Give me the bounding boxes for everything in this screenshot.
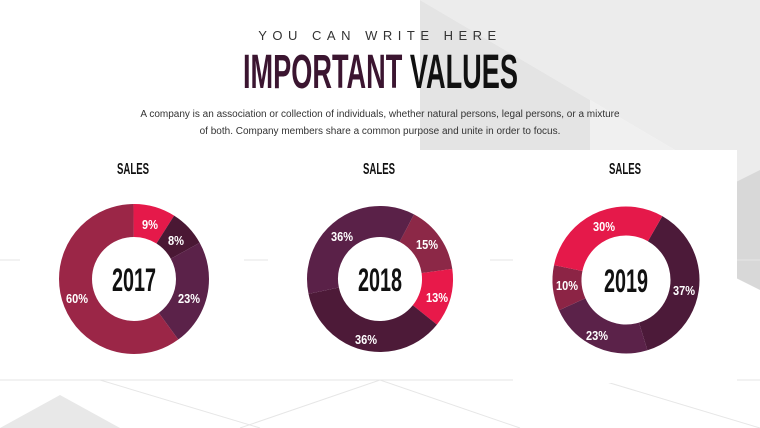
panel: 2018: 36% [331, 229, 353, 244]
panel: 2018: 36% [355, 332, 377, 347]
panel: 2018: 13% [426, 290, 448, 305]
subtitle: YOU CAN WRITE HERE [258, 28, 502, 43]
heading 2017 panel: SALES [117, 161, 149, 178]
panel: 2019: 2019 [604, 263, 648, 299]
donut chart 2019 [545, 199, 707, 361]
panel: 2018 [268, 150, 490, 372]
panel: 2018: 2018 [358, 262, 402, 298]
panel: 2017 [20, 150, 244, 370]
donut chart 2017 [76, 220, 192, 338]
panel: 2017: 2017 [112, 262, 156, 298]
panel: 2017: 60% [66, 291, 88, 306]
panel: 2017: 9% [142, 217, 158, 232]
panel: 2017: 23% [178, 291, 200, 306]
panel: 2019: 30% [593, 219, 615, 234]
description [140, 109, 620, 137]
title: IMPORTANT VALUES [243, 46, 518, 99]
description: of both. Company members share a common purpose and unite in order to focus. [200, 126, 560, 137]
description: A company is an association or collection of individuals, whether natural persons, legal persons, or a mixture [140, 109, 620, 120]
panel: 2019: 37% [673, 283, 695, 298]
panel: 2018: 15% [416, 237, 438, 252]
panel: 2017: 8% [168, 233, 184, 248]
heading 2018 panel: SALES [363, 161, 395, 178]
panel: 2019: 10% [556, 278, 578, 293]
heading 2019 panel: SALES [609, 161, 641, 178]
panel: 2019: 23% [586, 328, 608, 343]
donut chart 2018 [302, 201, 458, 357]
panel: 2019 [513, 150, 737, 383]
